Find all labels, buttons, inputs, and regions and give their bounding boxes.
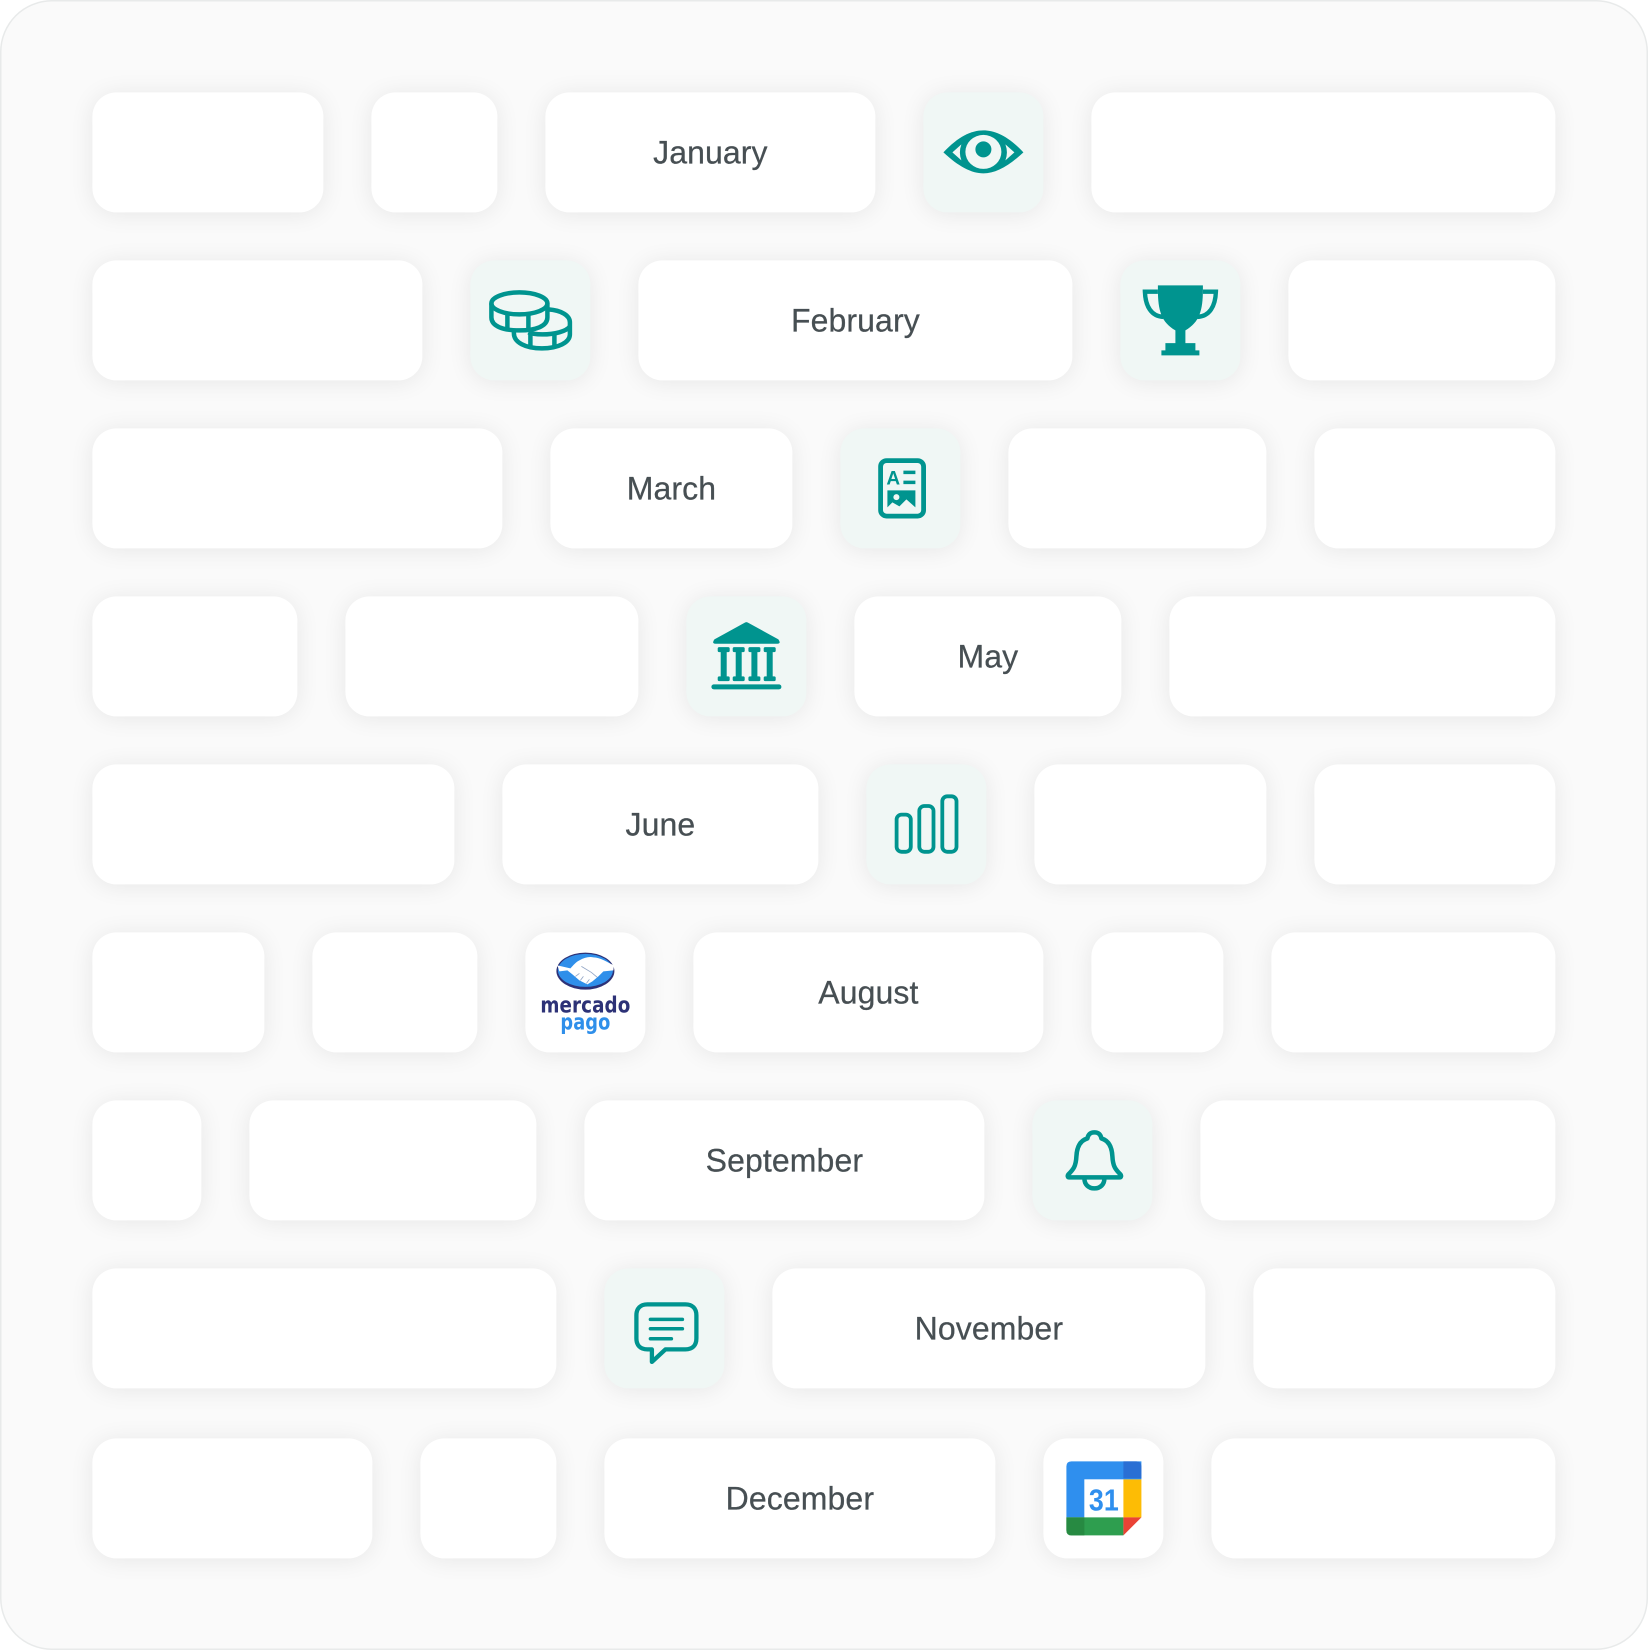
- icon: mercado pago logo: pago: [560, 1010, 610, 1035]
- card: row 1 blank 2: [371, 92, 497, 212]
- card: January: January: [653, 134, 768, 170]
- card: August: August: [818, 974, 919, 1010]
- card: May: [854, 596, 1121, 716]
- card: row 2 blank 2: [1288, 260, 1555, 380]
- icon: mercado pago logo: [525, 932, 645, 1052]
- icon: coins: [470, 260, 590, 380]
- card: row 5 blank 3: [1314, 764, 1555, 884]
- icon: bell: [1032, 1100, 1152, 1220]
- icon: google calendar: [1043, 1438, 1163, 1558]
- icon: chat bubble: [604, 1268, 724, 1388]
- card: September: [584, 1100, 984, 1220]
- card: row 9 blank 2: [420, 1438, 556, 1558]
- icon: mercado pago logo: mercado: [540, 993, 630, 1018]
- card: February: [638, 260, 1072, 380]
- card: June: June: [625, 806, 695, 842]
- card: row 4 blank 1: [92, 596, 297, 716]
- card: row 5 blank 2: [1034, 764, 1266, 884]
- card: row 4 blank 3: [1169, 596, 1555, 716]
- card: row 6 blank 4: [1271, 932, 1555, 1052]
- card: November: November: [915, 1310, 1063, 1346]
- card: May: May: [958, 638, 1018, 674]
- card: August: [693, 932, 1043, 1052]
- icon: bank: [686, 596, 806, 716]
- card: row 1 blank 3: [1091, 92, 1555, 212]
- card: row 9 blank 1: [92, 1438, 372, 1558]
- card: December: [604, 1438, 995, 1558]
- card: row 9 blank 3: [1211, 1438, 1555, 1558]
- icon: trophy: [1120, 260, 1240, 380]
- card: row 4 blank 2: [345, 596, 638, 716]
- icon: document: [840, 428, 960, 548]
- card: row 7 blank 3: [1200, 1100, 1555, 1220]
- card: row 7 blank 1: [92, 1100, 201, 1220]
- card: November: [772, 1268, 1205, 1388]
- card: December: December: [726, 1480, 874, 1516]
- card: March: March: [627, 470, 716, 506]
- card: row 6 blank 1: [92, 932, 264, 1052]
- card: row 6 blank 3: [1091, 932, 1223, 1052]
- card: row 2 blank 1: [92, 260, 422, 380]
- card: row 5 blank 1: [92, 764, 454, 884]
- card: September: September: [706, 1142, 863, 1178]
- card: row 1 blank 1: [92, 92, 323, 212]
- card: February: February: [791, 302, 920, 338]
- card: row 3 blank 3: [1314, 428, 1555, 548]
- card: June: [502, 764, 818, 884]
- card: March: [550, 428, 792, 548]
- card: January: [545, 92, 875, 212]
- card: row 3 blank 2: [1008, 428, 1266, 548]
- card: row 3 blank 1: [92, 428, 502, 548]
- card: row 7 blank 2: [249, 1100, 536, 1220]
- icon: eye: [923, 92, 1043, 212]
- icon: google calendar: 31: [1089, 1482, 1119, 1517]
- card: row 8 blank 1: [92, 1268, 556, 1388]
- icon: document: A: [886, 468, 900, 489]
- card: row 8 blank 2: [1253, 1268, 1555, 1388]
- card: row 6 blank 2: [312, 932, 477, 1052]
- icon: bar chart: [866, 764, 986, 884]
